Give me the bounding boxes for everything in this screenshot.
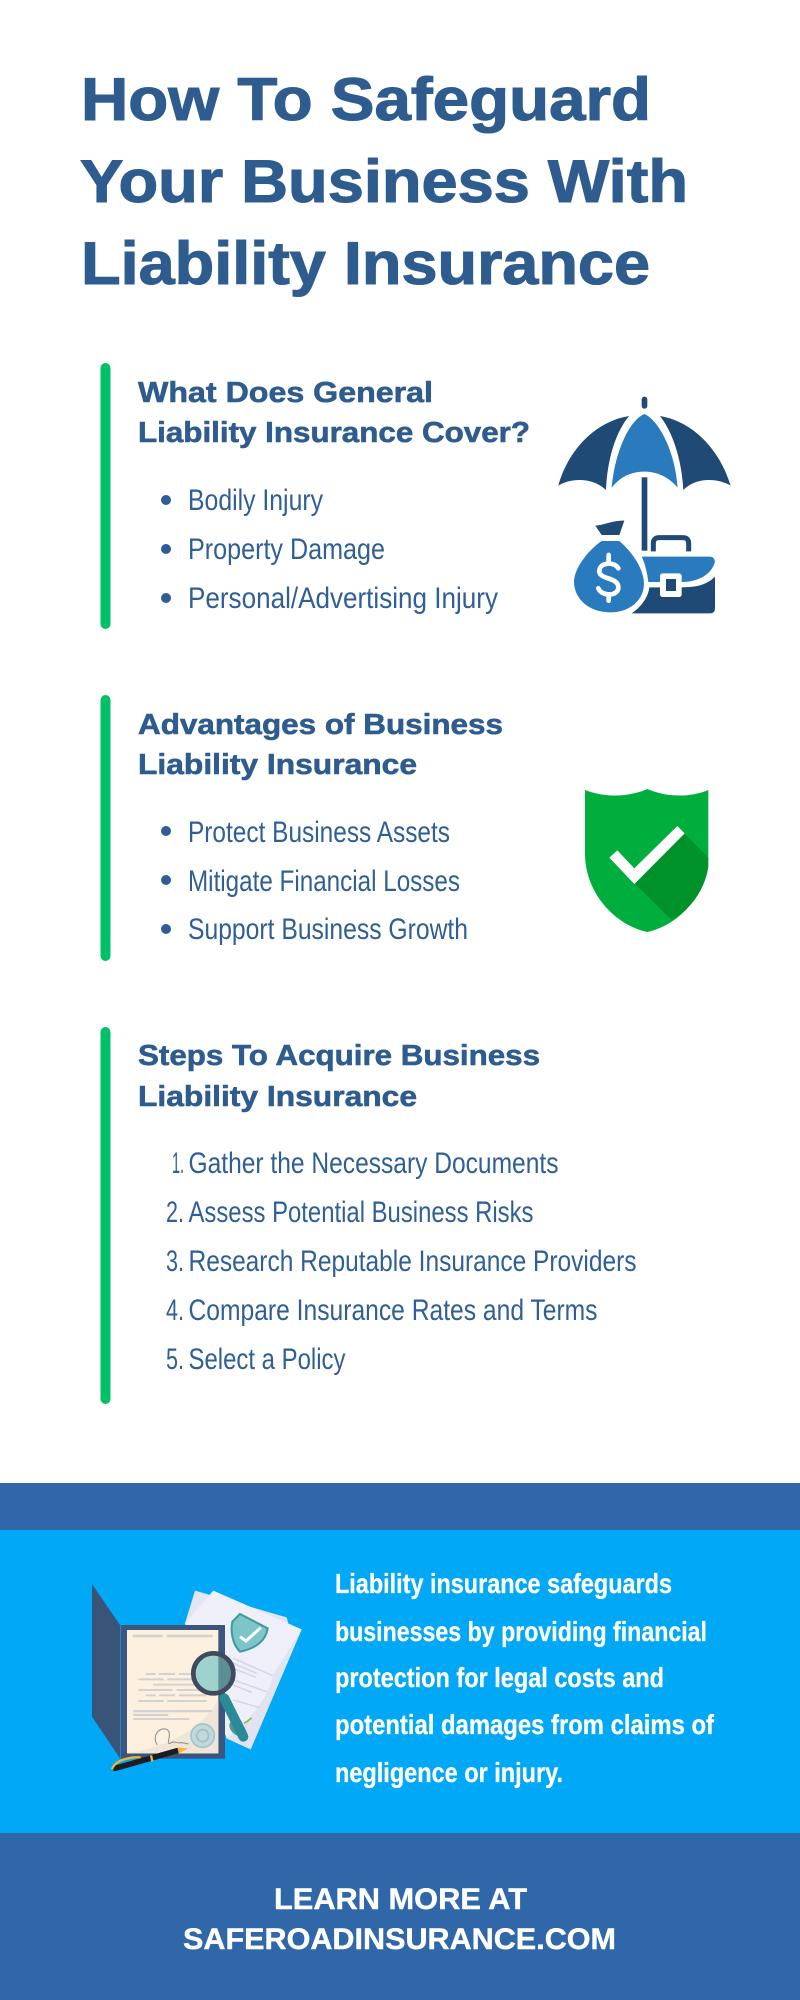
- summary text: protection for legal costs and: [335, 1662, 664, 1693]
- bullet list: [161, 484, 498, 615]
- numbered list: [166, 1147, 636, 1376]
- heading: Liability Insurance: [138, 1081, 417, 1113]
- footer text: [183, 1883, 616, 1956]
- heading: Advantages of Business: [138, 709, 503, 741]
- numbered list: Gather the Necessary Documents: [188, 1147, 558, 1180]
- numbered list: 5.: [166, 1343, 184, 1376]
- bullet list: Mitigate Financial Losses: [188, 865, 460, 898]
- panel: summary callout: [0, 1530, 800, 1833]
- title: Your Business With: [80, 148, 688, 215]
- icon: signed policy document with magnifier: [92, 1584, 302, 1769]
- accent bar: [100, 1027, 110, 1404]
- bullet list: Support Business Growth: [188, 913, 468, 946]
- title: [80, 66, 688, 297]
- heading: [138, 377, 530, 449]
- heading: Steps To Acquire Business: [138, 1040, 540, 1072]
- footer text: SAFEROADINSURANCE.COM: [183, 1923, 616, 1956]
- title: Liability Insurance: [81, 230, 650, 297]
- bullet list: Bodily Injury: [188, 484, 323, 517]
- heading: [138, 1040, 540, 1113]
- summary text: Liability insurance safeguards: [335, 1568, 672, 1599]
- panel: steps to acquire: [100, 1027, 636, 1404]
- panel: advantages: [100, 695, 708, 961]
- panel: footer call to action: [0, 1833, 800, 2000]
- numbered list: 3.: [166, 1245, 184, 1278]
- bullet list: Property Damage: [188, 533, 385, 566]
- bullet list: [161, 816, 468, 946]
- icon: umbrella over money bag and briefcase: [558, 397, 731, 613]
- numbered list: 2.: [166, 1196, 184, 1229]
- bullet list: Personal/Advertising Injury: [188, 582, 498, 615]
- numbered list: 1.: [172, 1147, 184, 1180]
- summary text: negligence or injury.: [335, 1757, 563, 1788]
- heading: Liability Insurance Cover?: [138, 417, 530, 449]
- numbered list: Compare Insurance Rates and Terms: [188, 1294, 598, 1327]
- footer text: LEARN MORE AT: [274, 1883, 527, 1916]
- accent bar: [100, 695, 110, 961]
- numbered list: Assess Potential Business Risks: [188, 1196, 534, 1229]
- numbered list: 4.: [166, 1294, 184, 1327]
- summary text: businesses by providing financial: [335, 1616, 707, 1647]
- heading: [138, 709, 503, 781]
- summary text: [335, 1568, 715, 1788]
- icon: green shield with check: [585, 789, 708, 932]
- numbered list: Select a Policy: [188, 1343, 346, 1376]
- numbered list: Research Reputable Insurance Providers: [188, 1245, 636, 1278]
- accent bar: [100, 363, 110, 629]
- summary text: potential damages from claims of: [335, 1709, 715, 1740]
- heading: What Does General: [138, 377, 433, 409]
- title: How To Safeguard: [81, 66, 651, 133]
- bullet list: Protect Business Assets: [188, 816, 450, 849]
- panel: general liability coverage: [100, 363, 731, 629]
- top band: [0, 1483, 800, 1530]
- heading: Liability Insurance: [138, 749, 417, 781]
